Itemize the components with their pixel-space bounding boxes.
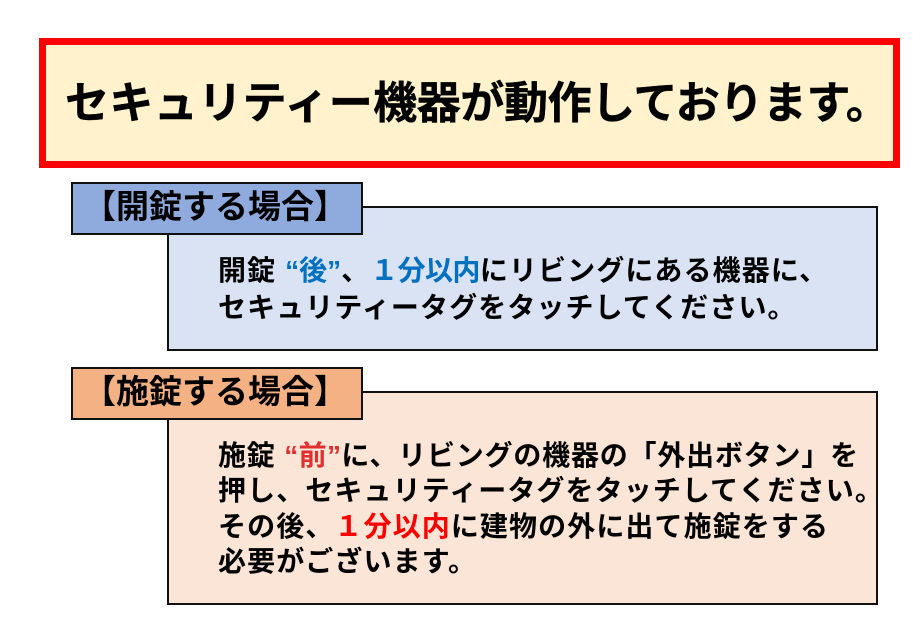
panel: locking body	[167, 391, 878, 605]
panel: locking tab heading: 【施錠する場合】	[83, 373, 347, 410]
text: locking instructions: その後、１分以内に建物の外に出て施錠をする	[218, 511, 829, 542]
title banner	[39, 38, 900, 168]
text: unlocking instructions	[218, 255, 828, 323]
text: unlocking instructions: セキュリティータグをタッチしてください。	[218, 292, 797, 323]
panel: unlocking tab heading	[71, 182, 363, 235]
text: locking instructions: 押し、セキュリティータグをタッチしてください。	[218, 475, 884, 506]
panel: unlocking body	[167, 206, 878, 351]
text: locking instructions	[218, 440, 884, 577]
panel: unlocking tab heading: 【開錠する場合】	[83, 188, 347, 225]
panel: locking tab heading	[71, 367, 363, 420]
title text: セキュリティー機器が動作しております。	[65, 79, 889, 128]
text: unlocking instructions: 開錠 “後”、１分以内にリビングにある機器に、	[218, 255, 828, 286]
text: locking instructions: 必要がございます。	[218, 546, 477, 577]
text: locking instructions: 施錠 “前”に、リビングの機器の「外出ボタン」を	[218, 440, 859, 471]
